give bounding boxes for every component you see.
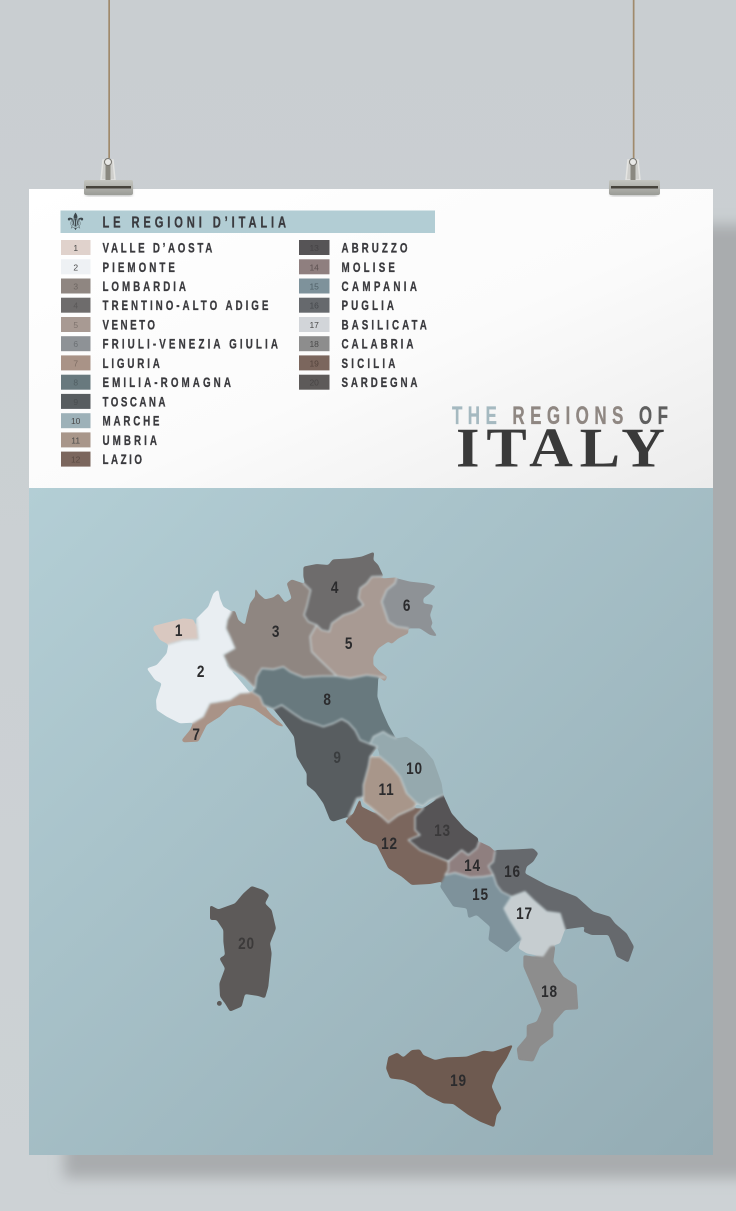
main title: ITALY [456,417,665,479]
legend column 2: SICILIA [342,355,396,371]
legend column 2 [299,240,427,391]
clip left [84,158,133,196]
region 19 [386,1044,513,1127]
icon: fleur-de-lis: ⚜ [65,208,86,236]
legend column 2: MOLISE [342,259,395,275]
legend column 1: 1 [73,243,78,253]
title [452,402,668,479]
region numbers: 4 [331,579,339,597]
legend column 1: EMILIA-ROMAGNA [102,374,231,391]
legend column 1: UMBRIA [102,432,157,448]
legend column 1: LOMBARDIA [102,278,186,294]
region 4 [303,552,383,632]
legend column 2: 17 [309,320,319,330]
northern and central regions [147,552,443,823]
legend column 2: 18 [309,339,319,349]
legend column 1: 10 [71,416,81,426]
poster [29,189,713,1155]
region numbers: 18 [541,983,558,1001]
region numbers: 12 [381,835,398,853]
region 3 [223,579,337,688]
region numbers: 3 [272,623,280,641]
southern regions [345,795,634,1127]
region numbers: 20 [238,935,255,953]
legend column 2: 15 [309,282,319,292]
legend column 1: 3 [73,282,78,292]
legend column 1: 5 [73,320,78,330]
legend column 1: TRENTINO-ALTO ADIGE [102,297,268,314]
region numbers: 10 [406,760,423,778]
legend column 1: 8 [73,378,78,388]
blue map panel [29,488,713,1155]
region 16 [488,848,634,963]
region 9 [273,705,377,822]
legend column 2: PUGLIA [342,297,394,314]
region 15 [440,873,522,953]
region numbers: 17 [516,905,533,923]
region 6 [382,578,438,637]
legend column 2: BASILICATA [342,317,427,333]
legend column 1: 9 [73,397,78,407]
hanging string right [633,0,634,158]
legend column 2: CALABRIA [342,336,414,352]
legend column 1: VALLE D’AOSTA [102,240,213,256]
legend column 2: 16 [309,301,319,311]
region numbers: 6 [403,597,411,615]
legend column 1: MARCHE [102,413,159,429]
region numbers: 11 [379,781,394,799]
region numbers: 14 [464,857,481,875]
region numbers: 8 [323,691,332,709]
clip right [609,158,660,196]
region 17 [504,892,565,957]
legend column 1: 2 [73,262,78,272]
region numbers: 19 [450,1072,467,1090]
legend column 1: LIGURIA [102,355,160,371]
subtitle: THE REGIONS OF [452,402,668,430]
legend column 1: 6 [73,339,78,349]
region 10 [370,732,443,806]
region numbers: 5 [345,635,353,653]
legend column 1: LAZIO [102,451,142,468]
region 8 [252,667,396,744]
legend column 1: TOSCANA [102,394,166,410]
legend column 2: 13 [309,243,319,253]
legend column 2: CAMPANIA [342,278,417,294]
legend column 2: 19 [309,358,319,368]
legend column 2: 14 [309,262,319,272]
region 7 [182,692,286,742]
region 13 [408,795,478,860]
legend column 1: 12 [71,455,81,465]
legend column 1: VENETO [102,317,155,333]
region 5 [310,577,408,682]
region 20 [210,886,276,1012]
poster shadow [64,225,736,1178]
legend column 1: 7 [73,358,78,368]
region numbers: 13 [434,822,451,840]
legend column 2: SARDEGNA [342,374,418,391]
region numbers: 16 [504,863,521,881]
hanging string left [108,0,110,158]
region numbers: 2 [197,663,205,681]
region numbers: 7 [192,726,201,744]
region numbers [175,579,558,1090]
legend header [60,208,435,236]
region 14 [445,842,495,877]
region 2 [147,589,250,723]
white header panel [29,189,713,488]
map of Italy [147,552,634,1127]
region numbers: 15 [472,886,489,904]
legend column 1: 4 [73,301,78,311]
region 1 [153,618,198,644]
region numbers: 1 [175,622,183,640]
legend column 1 [61,240,278,468]
legend column 2: 20 [309,378,319,388]
region 11 [363,757,417,823]
region 12 [345,798,448,885]
legend column 1: FRIULI-VENEZIA GIULIA [102,336,278,352]
legend column 1: PIEMONTE [102,259,175,275]
region 18 [517,945,578,1062]
legend column 2: ABRUZZO [342,240,408,256]
legend heading: LE REGIONI D’ITALIA [102,214,286,231]
region numbers: 9 [333,749,342,767]
legend column 1: 11 [71,435,80,445]
